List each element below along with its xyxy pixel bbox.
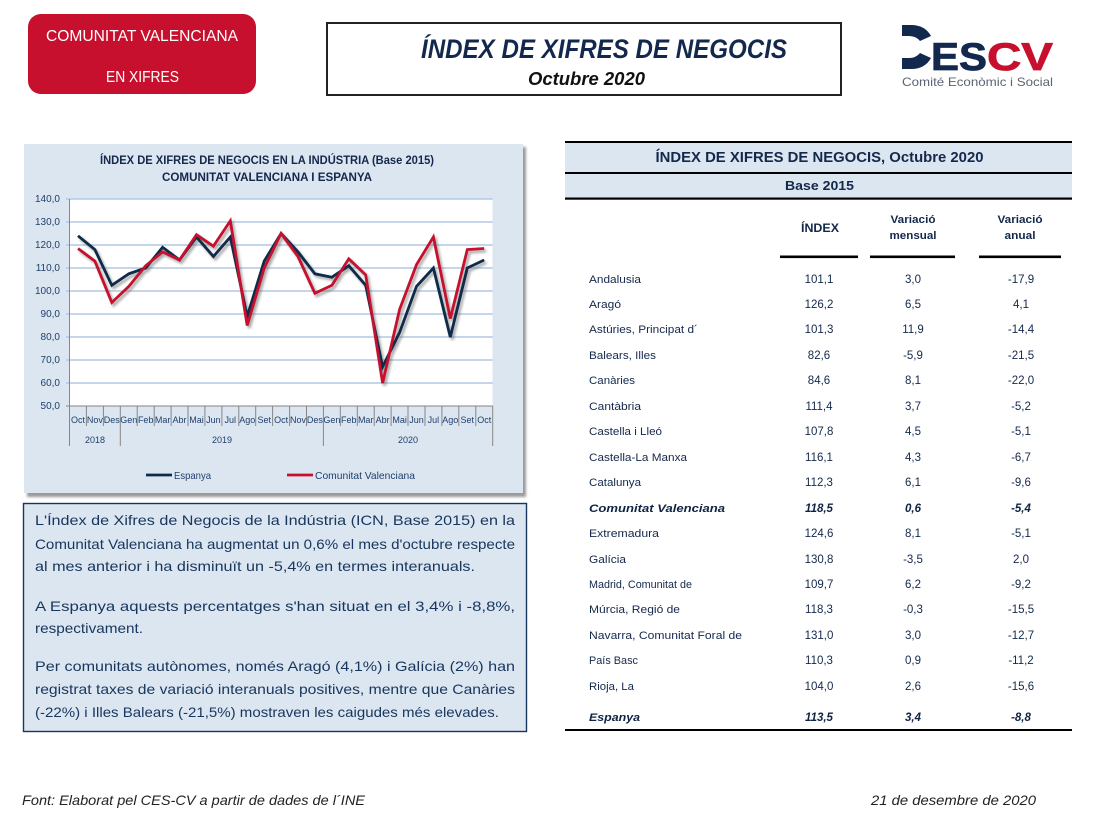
y axis labels: 110,0 xyxy=(36,263,60,274)
x axis month labels: Jun xyxy=(409,415,424,425)
text block: commentary: Per comunitats autònomes, només Aragó (4,1%) i Galícia (2%) han xyxy=(35,658,515,674)
column: variació anual: -15,5 xyxy=(1008,604,1034,616)
column: índex: 111,4 xyxy=(805,401,833,413)
row labels: Comunitat Valenciana xyxy=(589,503,725,515)
x axis month labels: Mai xyxy=(392,415,407,425)
row labels: Extremadura xyxy=(589,528,660,540)
x axis month labels: Mar xyxy=(358,415,373,425)
text block: commentary: A Espanya aquests percentatges s'han situat en el 3,4% i -8,8%, xyxy=(35,598,515,614)
chart title: COMUNITAT VALENCIANA I ESPANYA xyxy=(162,172,372,184)
y axis labels: 50,0 xyxy=(41,401,60,412)
column headers xyxy=(780,214,1061,258)
text block: commentary: Comunitat Valenciana ha augmentat un 0,6% el mes d'octubre respecte xyxy=(35,536,515,552)
y axis labels: 80,0 xyxy=(41,332,60,343)
badge: Comunitat Valenciana en xifres: COMUNITAT VALENCIANA xyxy=(46,28,239,45)
row labels: Madrid, Comunitat de xyxy=(589,579,692,591)
column: índex: 107,8 xyxy=(805,426,833,438)
badge: Comunitat Valenciana en xifres: EN XIFRES xyxy=(106,69,179,86)
source note: Font: Elaborat pel CES-CV a partir de dades de l´INE xyxy=(22,792,366,808)
column: variació mensual: -5,9 xyxy=(903,350,923,362)
x axis month labels: Abr xyxy=(376,415,390,425)
chart title xyxy=(100,154,434,184)
title box: ÍNDEX DE XIFRES DE NEGOCIS xyxy=(421,33,787,64)
text block: commentary xyxy=(24,504,526,732)
column headers: anual xyxy=(1004,230,1036,242)
column: variació anual: -21,5 xyxy=(1008,350,1034,362)
column: índex: 84,6 xyxy=(808,375,830,387)
column: variació mensual: 2,6 xyxy=(905,681,921,693)
row labels: Catalunya xyxy=(589,477,642,489)
column: variació mensual xyxy=(902,274,924,724)
column: variació mensual: 4,3 xyxy=(905,452,921,464)
column: variació mensual: 3,0 xyxy=(905,630,921,642)
column: índex: 110,3 xyxy=(805,655,833,667)
column: variació anual: -8,8 xyxy=(1011,712,1032,724)
row labels: Andalusia xyxy=(589,274,642,286)
legend: Espanya xyxy=(146,470,211,482)
y axis labels: 60,0 xyxy=(41,378,60,389)
column: variació anual: -5,1 xyxy=(1011,426,1031,438)
column: índex: 118,5 xyxy=(805,503,834,515)
x axis month labels: Jun xyxy=(206,415,221,425)
column: índex: 126,2 xyxy=(805,299,833,311)
column headers: ÍNDEX xyxy=(801,220,839,235)
logo: CES-CV: CV xyxy=(987,36,1053,79)
column: variació mensual: 0,6 xyxy=(905,503,922,515)
table heading: Base 2015 xyxy=(785,178,854,193)
column: variació anual: -11,2 xyxy=(1008,655,1034,667)
row labels: Múrcia, Regió de xyxy=(589,604,680,616)
line: Espanya xyxy=(78,234,484,367)
title box: Octubre 2020 xyxy=(528,68,646,89)
logo: CES-CV: Comité Econòmic i Social xyxy=(902,75,1053,89)
y axis labels xyxy=(35,194,60,412)
row labels: Astúries, Principat d´ xyxy=(589,324,698,336)
column: variació anual: -15,6 xyxy=(1008,681,1034,693)
column: variació anual: 4,1 xyxy=(1013,299,1029,311)
x axis month labels: Gen xyxy=(323,415,340,425)
x axis month labels: Nov xyxy=(87,415,103,425)
row labels: Canàries xyxy=(589,375,636,387)
column headers: mensual xyxy=(890,230,936,242)
row labels: Rioja, La xyxy=(589,681,635,693)
y axis labels: 130,0 xyxy=(35,217,60,228)
x axis month labels: Des xyxy=(307,415,323,425)
x axis month labels: Set xyxy=(257,415,271,425)
column: variació anual: -14,4 xyxy=(1008,324,1035,336)
column: variació mensual: 3,7 xyxy=(905,401,921,413)
row labels: País Basc xyxy=(589,655,638,667)
column: variació mensual: -3,5 xyxy=(903,554,923,566)
column: variació mensual: 3,0 xyxy=(905,274,921,286)
row labels: Navarra, Comunitat Foral de xyxy=(589,630,742,642)
badge: Comunitat Valenciana en xifres xyxy=(28,14,256,94)
legend: Espanya: Espanya xyxy=(174,470,211,482)
column: variació anual: -22,0 xyxy=(1008,375,1034,387)
row labels: Espanya xyxy=(589,712,640,724)
x axis year labels: 2018 xyxy=(85,435,105,445)
x axis month labels: Oct xyxy=(274,415,289,425)
column: variació mensual: 4,5 xyxy=(905,426,921,438)
text block: commentary: registrat taxes de variació interanuals positives, mentre que Canàries xyxy=(35,681,515,697)
column headers: Variació xyxy=(890,214,936,226)
column: variació mensual: 6,1 xyxy=(905,477,921,489)
x axis year labels xyxy=(85,435,418,445)
column: variació mensual: 6,2 xyxy=(905,579,921,591)
column: índex: 131,0 xyxy=(805,630,833,642)
row labels: Balears, Illes xyxy=(589,350,657,362)
column: índex: 112,3 xyxy=(805,477,833,489)
y axis labels: 100,0 xyxy=(35,286,60,297)
column: variació mensual: 8,1 xyxy=(905,528,921,540)
line shadows xyxy=(80,223,486,386)
column: variació anual: -5,4 xyxy=(1011,503,1032,515)
row labels: Castella-La Manxa xyxy=(589,452,688,464)
y axis labels: 90,0 xyxy=(41,309,60,320)
legend: Comunitat Valenciana: Comunitat Valenciana xyxy=(315,470,415,482)
y axis labels: 140,0 xyxy=(35,194,60,205)
column: variació anual: 2,0 xyxy=(1013,554,1029,566)
x axis year labels: 2019 xyxy=(212,435,232,445)
row labels xyxy=(589,274,742,724)
column: variació anual: -9,6 xyxy=(1011,477,1031,489)
column: índex: 124,6 xyxy=(805,528,833,540)
column: variació mensual: 8,1 xyxy=(905,375,921,387)
column: índex: 109,7 xyxy=(805,579,833,591)
y axis labels: 70,0 xyxy=(41,355,60,366)
x axis month labels: Mar xyxy=(155,415,170,425)
column headers: Variació xyxy=(998,214,1043,226)
column: variació mensual: 6,5 xyxy=(905,299,921,311)
column: variació anual xyxy=(1008,274,1035,724)
column: variació anual: -5,2 xyxy=(1011,401,1031,413)
column: variació anual: -5,1 xyxy=(1011,528,1031,540)
table heading: ÍNDEX DE XIFRES DE NEGOCIS, Octubre 2020 xyxy=(656,149,984,166)
row labels: Aragó xyxy=(589,299,621,311)
logo: CES-CV xyxy=(902,25,1053,89)
row labels: Castella i Lleó xyxy=(589,426,662,438)
column: índex: 116,1 xyxy=(805,452,833,464)
table: index by region xyxy=(565,141,1072,731)
table heading xyxy=(565,141,1072,200)
x axis year labels: 2020 xyxy=(398,435,418,445)
text block: commentary: al mes anterior i ha disminuït un -5,4% en termes interanuals. xyxy=(35,558,475,574)
chart title: ÍNDEX DE XIFRES DE NEGOCIS EN LA INDÚSTRIA (Base 2015) xyxy=(100,154,434,167)
x axis month labels: Oct xyxy=(71,415,85,425)
column: índex xyxy=(805,274,834,724)
text block: commentary: L'Índex de Xifres de Negocis de la Indústria (ICN, Base 2015) en la xyxy=(35,512,515,528)
column: índex: 101,1 xyxy=(805,274,833,286)
column: variació mensual: 11,9 xyxy=(902,324,924,336)
x axis month labels: Oct xyxy=(477,415,492,425)
column: variació anual: -6,7 xyxy=(1011,452,1031,464)
column: índex: 118,3 xyxy=(805,604,833,616)
date: 21 de desembre de 2020 xyxy=(870,792,1036,808)
text block: commentary: (-22%) i Illes Balears (-21,5%) mostraven les caigudes més elevades. xyxy=(35,704,499,720)
x axis month labels: Feb xyxy=(341,415,357,425)
x axis month labels: Ago xyxy=(442,415,458,425)
x axis month labels: Des xyxy=(104,415,120,425)
column: índex: 82,6 xyxy=(808,350,830,362)
x axis month labels xyxy=(71,415,492,425)
x axis month labels: Jul xyxy=(225,415,236,425)
column: índex: 101,3 xyxy=(805,324,833,336)
x axis month labels: Set xyxy=(461,415,475,425)
x axis month labels: Feb xyxy=(138,415,153,425)
y axis labels: 120,0 xyxy=(35,240,60,251)
x axis month labels: Nov xyxy=(290,415,306,425)
column: índex: 104,0 xyxy=(805,681,833,693)
x axis month labels: Jul xyxy=(428,415,439,425)
x axis month labels: Ago xyxy=(239,415,255,425)
x axis month labels: Mai xyxy=(189,415,204,425)
column: variació anual: -12,7 xyxy=(1008,630,1034,642)
column: variació anual: -9,2 xyxy=(1011,579,1031,591)
column: variació anual: -17,9 xyxy=(1008,274,1034,286)
x axis month labels: Abr xyxy=(172,415,187,425)
text block: commentary: respectivament. xyxy=(35,620,143,636)
column: variació mensual: -0,3 xyxy=(903,604,923,616)
x axis month labels: Gen xyxy=(120,415,137,425)
column: índex: 113,5 xyxy=(805,712,834,724)
line: Comunitat Valenciana xyxy=(78,221,484,383)
column: variació mensual: 3,4 xyxy=(905,712,922,724)
column: variació mensual: 0,9 xyxy=(905,655,921,667)
row labels: Galícia xyxy=(589,554,627,566)
panel: line chart xyxy=(24,144,526,497)
title box xyxy=(327,23,841,95)
column: índex: 130,8 xyxy=(805,554,833,566)
logo: CES-CV: ES xyxy=(931,36,987,79)
row labels: Cantàbria xyxy=(589,401,642,413)
